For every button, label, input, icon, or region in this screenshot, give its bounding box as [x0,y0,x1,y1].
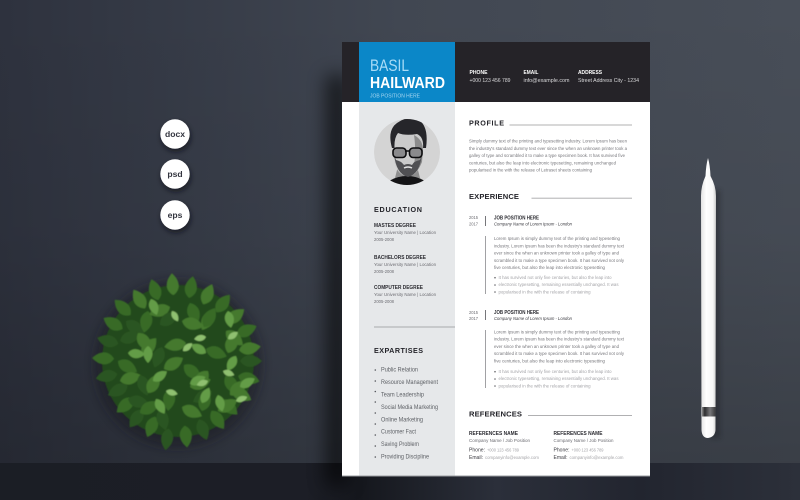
profile section: popularised in the with the release of Letraset sheets containing [469,168,592,172]
education section: 2005-2008 [374,269,394,274]
profile section: galley of type and scrambled it to make a type specimen book. It has survived five [469,153,625,158]
experience section: EXPERIENCE [469,192,519,201]
portrait photo [374,119,440,185]
experience entry 2: Lorem Ipsum is simply dummy text of the printing and typesetting [494,330,620,334]
experience entry 2: scrambled it to make a type specimen book. It has survived not only [494,351,625,356]
experience entry 1: popularised in the with the release of containing [498,289,591,294]
expertises section: Social Media Marketing [381,405,438,411]
reference 2: Company Name / Job Position [554,438,614,443]
expertises section: Online Marketing [381,418,423,424]
expertises section: Team Leadership [381,392,425,398]
experience entry 1: 2015 [469,215,478,220]
contact: address [578,70,639,84]
education section: COMPUTER DEGREE [374,285,424,291]
experience entry 2: Company Name of Lorem Ipsum - London [494,316,572,321]
experience entry 1: JOB POSITION HERE [494,216,540,222]
profile section: PROFILE [469,118,504,128]
education section: Your University Name | Location [374,230,436,235]
potted plant seen from above [92,273,262,451]
references section [469,410,632,461]
reference 1: +000 123 456 789 [487,448,519,452]
contact: phone [470,70,511,84]
blue name block: JOB POSITION HERE [370,94,421,100]
contact: email: info@example.com [524,78,570,84]
badge: eps: eps [168,210,183,220]
reference 2: companyinfo@example.com [570,455,624,460]
blue name block: HAILWARD [370,75,445,92]
experience entry 2: 2015 [469,310,478,315]
experience entry 1: 2017 [469,222,478,226]
education section: MASTES DEGREE [374,223,417,229]
experience entry 2: 2017 [469,316,478,321]
experience entry 1: It has survived not only five centuries, but also the leap into [498,275,612,280]
experience entry 1: industry. Lorem Ipsum has been the industry's standard dummy text [494,244,625,248]
experience section [469,192,632,388]
reference 2: REFERENCES NAME [554,431,603,437]
reference 1 [469,431,539,461]
references section: REFERENCES [469,410,522,418]
contact: phone: PHONE [470,70,488,76]
contact: email: EMAIL [524,70,539,76]
profile section: the industry's standard dummy text ever since the when an unknown printer took a [469,146,627,151]
experience entry 2: electronic typesetting, remaining essentially unchanged. It was [498,376,619,381]
reference 1: Email: [469,455,483,461]
sidebar panel [359,102,455,476]
experience entry 1 [469,215,625,294]
stylus metal band [702,407,716,416]
contact: address: Street Address City - 1234 [578,78,639,84]
education section [374,205,436,304]
education section: 2005-2008 [374,237,394,242]
blue name block [359,42,455,102]
reference 1: REFERENCES NAME [469,431,519,437]
profile section: Simply dummy text of the printing and typesetting industry. Lorem Ipsum has been [469,138,627,144]
experience entry 1: Company Name of Lorem Ipsum - London [494,222,572,227]
expertises section [374,346,438,460]
stylus pencil [701,158,720,438]
contact: phone: +000 123 456 789 [470,78,511,84]
experience entry 2: It has survived not only five centuries, but also the leap into [498,369,612,374]
expertises section: Saving Problem [381,442,419,448]
experience entry 1: Lorem Ipsum is simply dummy text of the printing and typesetting [494,236,620,241]
header band [342,42,650,102]
contact: address: ADDRESS [578,70,603,76]
expertises section: Public Relation [381,368,418,374]
education section: BACHELORS DEGREE [374,255,427,261]
experience entry 2 [469,310,625,388]
experience entry 1: electronic typesetting, remaining essentially unchanged. It was [498,282,619,287]
profile section: centuries, but also the leap into electronic typesetting, remaining unchanged [469,160,616,166]
blue name block: BASIL [370,57,409,75]
reference 1: companyinfo@example.com [485,455,539,460]
experience entry 2: popularised in the with the release of containing [498,383,591,388]
experience entry 2: industry. Lorem Ipsum has been the industry's standard dummy text [494,337,625,342]
experience entry 2: JOB POSITION HERE [494,310,540,316]
reference 1: Company Name / Job Position [469,438,530,443]
badge: psd: psd [167,169,183,179]
resume document [342,42,650,476]
reference 2 [554,431,624,461]
education section: 2005-2008 [374,299,394,304]
format badges [160,119,191,233]
education section: Your University Name | Location [374,262,436,267]
education section: Your University Name | Location [374,292,436,297]
reference 1: Phone: [469,448,485,454]
expertises section: EXPARTISES [374,346,423,355]
experience entry 2: five centuries, but also the leap into electronic typesetting [494,358,605,363]
expertises section: Resource Management [381,380,438,386]
badge: docx: docx [165,129,185,139]
experience entry 1: ever since the when an unknown printer took a galley of type and [494,251,619,256]
reference 2: Email: [554,455,568,461]
expertises section: Providing Discipline [381,454,430,460]
profile section [469,118,632,172]
experience entry 1: scrambled it to make a type specimen book. It has survived not only [494,258,625,263]
expertises section: Customer Fact [381,430,416,436]
reference 2: +000 123 456 789 [572,448,604,452]
education section: EDUCATION [374,205,422,214]
reference 2: Phone: [554,448,570,454]
experience entry 2: ever since the when an unknown printer took a galley of type and [494,344,619,349]
contact: email [524,70,570,84]
experience entry 1: five centuries, but also the leap into electronic typesetting [494,265,605,270]
